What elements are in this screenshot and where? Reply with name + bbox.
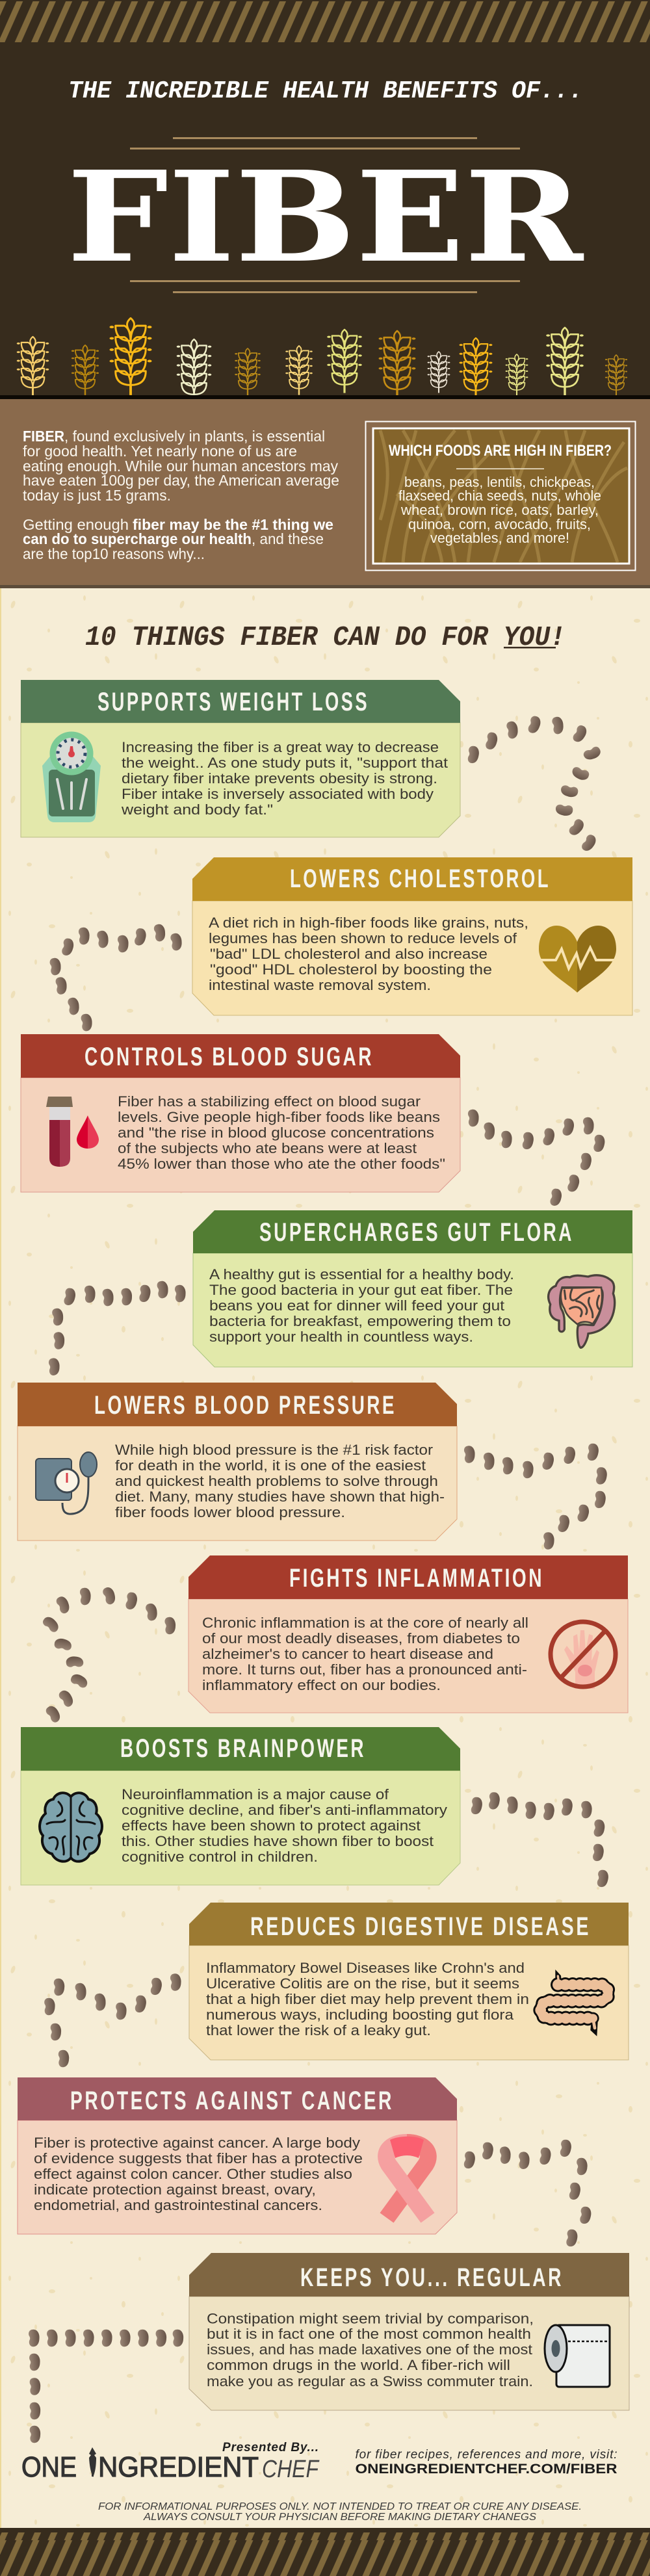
icon: brain [40, 1793, 102, 1862]
foods list: beans, peas, lentils, chickpeas, [404, 474, 595, 490]
intro text: Getting enough [23, 516, 129, 533]
body text: 45% lower than those who ate the other foods" [118, 1156, 445, 1172]
black divider [0, 395, 650, 399]
page background [0, 588, 650, 2532]
icon: inflamed hand [551, 1622, 616, 1689]
presented by: Presented By... [222, 2441, 318, 2454]
intro text: today is just 15 grams. [23, 487, 171, 504]
icon: toilet paper [545, 2325, 610, 2387]
website call to action [355, 2448, 618, 2477]
foods callout box [365, 421, 636, 571]
icon: carrot [89, 2447, 96, 2477]
body text: effects have been shown to protect against [122, 1817, 421, 1834]
body text [34, 2135, 363, 2213]
body text: that lower the risk of a leaky gut. [206, 2022, 431, 2038]
body text: alzheimer's to cancer to heart disease and [202, 1646, 493, 1662]
logo: one ingredient chef: ONE [21, 2451, 77, 2483]
body text: intestinal waste removal system. [209, 977, 431, 993]
icon: heart [539, 926, 616, 993]
heading: LOWERS BLOOD PRESSURE [94, 1391, 396, 1420]
wheat row [17, 319, 627, 403]
body text [202, 1615, 528, 1693]
body text [209, 915, 528, 993]
body text [118, 1093, 445, 1172]
body text: common drugs in the world. A fiber-rich will [207, 2357, 510, 2373]
body text [206, 1960, 529, 2038]
intro text: for good health. Yet nearly none of us are [23, 443, 297, 460]
logo: one ingredient chef [21, 2441, 319, 2483]
bean trail 3 [467, 1109, 605, 1206]
body text: that a high fiber diet may help prevent them in [206, 1991, 529, 2007]
bean trail 2 [49, 923, 183, 1032]
body text: and "the rise in blood glucose concentrations [118, 1125, 434, 1141]
heading: BOOSTS BRAINPOWER [120, 1734, 366, 1763]
body text: bacteria for breakfast, empowering them to [209, 1313, 511, 1329]
left edge strip [0, 588, 1, 2529]
disclaimer [98, 2501, 582, 2523]
body text: numerous ways, including boosting gut flora [206, 2007, 514, 2023]
body text: A healthy gut is essential for a healthy body. [209, 1266, 514, 1282]
body text: weight and body fat." [121, 801, 273, 818]
logo: one ingredient chef: NGREDIENT [98, 2451, 259, 2483]
body text: support your health in countless ways. [209, 1329, 473, 1345]
bean trail 9 [463, 2139, 592, 2247]
body text [121, 739, 448, 818]
body text: of our most deadly diseases, from diabetes to [202, 1630, 520, 1646]
body text: "good" HDL cholesterol by boosting the [210, 961, 492, 978]
body text: fiber foods lower blood pressure. [115, 1504, 345, 1520]
body text [115, 1442, 445, 1520]
main title: FIBER [67, 144, 584, 291]
body text: Fiber intake is inversely associated with body [122, 786, 434, 802]
logo: one ingredient chef: I [90, 2451, 96, 2483]
background speckle texture [0, 588, 650, 2532]
intro text [23, 428, 339, 562]
icon: blood pressure monitor [36, 1452, 97, 1514]
disclaimer: ALWAYS CONSULT YOUR PHYSICIAN BEFORE MAKING DIETARY CHANEGS [143, 2512, 537, 2523]
intro text: are the top10 reasons why... [23, 545, 205, 562]
body text: inflammatory effect on our bodies. [202, 1677, 441, 1693]
intro text: can do to supercharge our health [23, 530, 252, 547]
panel: dark header [0, 0, 650, 403]
logo: one ingredient chef: CHEF [262, 2456, 319, 2483]
panel: lowers blood pressure [18, 1383, 457, 1541]
body text: indicate protection against breast, ovary, [34, 2181, 316, 2198]
intro text: eating enough. While our human ancestors may [23, 458, 338, 475]
intro text: , and these [252, 530, 324, 547]
panel: keeps you regular [189, 2253, 629, 2410]
icon: gut [549, 1275, 615, 1347]
foods list: quinoa, corn, avocado, fruits, [408, 516, 591, 532]
intro text: have eaten 100g per day, the American average [23, 472, 339, 489]
bean trail 4 [48, 1281, 187, 1376]
body text [209, 1266, 514, 1345]
subtitle: THE INCREDIBLE HEALTH BENEFITS OF... [68, 77, 583, 105]
heading: FIGHTS INFLAMMATION [289, 1564, 544, 1593]
body text: of evidence suggests that fiber has a protective [34, 2150, 363, 2166]
body text: Inflammatory Bowel Diseases like Crohn's and [206, 1960, 525, 1976]
panel: reduces digestive disease [189, 1903, 629, 2060]
icon: ribbon [386, 2137, 428, 2218]
bean trail 1 [467, 715, 603, 853]
body text: the weight.. As one study puts it, "support that [122, 755, 448, 771]
panel: introduction [0, 399, 650, 588]
body text: Increasing the fiber is a great way to decrease [122, 739, 439, 755]
body text: Ulcerative Colitis are on the rise, but it seems [206, 1975, 519, 1992]
body text: effect against colon cancer. Other studies also [34, 2166, 352, 2182]
body text: dietary fiber intake prevents obesity is strong. [122, 770, 437, 787]
heading: PROTECTS AGAINST CANCER [70, 2087, 394, 2115]
body text: beans you eat for dinner will feed your gut [209, 1297, 504, 1314]
website call to action: for fiber recipes, references and more, visit: [355, 2448, 618, 2462]
body text: "bad" LDL cholesterol and also increase [210, 946, 488, 962]
bean trail 10 [28, 2329, 184, 2443]
body text: cognitive control in children. [122, 1849, 318, 1865]
body text: The good bacteria in your gut eat fiber. The [209, 1282, 513, 1298]
body text: but it is in fact one of the most common health [207, 2326, 531, 2342]
body text: levels. Give people high-fiber foods like beans [118, 1109, 440, 1125]
intro text: , found exclusively in plants, is essential [64, 428, 325, 445]
icon: test tube and drop [46, 1097, 99, 1167]
body text: endometrial, and gastrointestinal cancers. [34, 2197, 322, 2213]
body text: and quickest health problems to solve through [115, 1473, 438, 1489]
bean trail 5 [463, 1443, 607, 1550]
body text: for death in the world, it is one of the easiest [115, 1457, 426, 1474]
body text: While high blood pressure is the #1 risk factor [115, 1442, 433, 1458]
panel: protects against cancer [18, 2077, 457, 2234]
lower rules [130, 280, 520, 293]
foods list: wheat, brown rice, oats, barley, [400, 502, 599, 518]
body text: this. Other studies have shown fiber to boost [122, 1833, 434, 1849]
body text [207, 2310, 534, 2389]
icon: intestines [541, 1970, 608, 2036]
panel: lowers cholesterol [192, 857, 632, 1015]
body text: more. It turns out, fiber has a pronounced anti- [202, 1661, 527, 1678]
heading: SUPPORTS WEIGHT LOSS [98, 688, 369, 716]
heading: CONTROLS BLOOD SUGAR [84, 1043, 374, 1071]
bean trail 6 [41, 1586, 176, 1724]
panel: supports weight loss [21, 680, 460, 837]
section heading: 10 THINGS FIBER CAN DO FOR YOU! [85, 621, 566, 653]
body text: Constipation might seem trivial by comparison, [207, 2310, 534, 2327]
panel: boosts brainpower [21, 1727, 460, 1885]
body text [122, 1786, 447, 1865]
body text: of the subjects who ate beans were at least [118, 1140, 417, 1156]
body text: make you as regular as a Swiss commuter train. [207, 2373, 533, 2389]
foods list: vegetables, and more! [430, 530, 569, 546]
striped top band [0, 1, 650, 42]
foods list [398, 474, 601, 546]
body text: A diet rich in high-fiber foods like grains, nuts, [209, 915, 528, 931]
body text: Fiber is protective against cancer. A large body [34, 2135, 360, 2151]
upper rules [130, 137, 520, 150]
intro text: FIBER [23, 428, 64, 445]
panel: controls blood sugar [21, 1034, 460, 1192]
body text: Neuroinflammation is a major cause of [122, 1786, 389, 1802]
body text: diet. Many, many studies have shown that high- [115, 1489, 445, 1505]
body text: issues, and has made laxatives one of the most [207, 2341, 532, 2358]
intro text: fiber may be the #1 thing we [133, 516, 333, 533]
disclaimer: FOR INFORMATIONAL PURPOSES ONLY. NOT INTENDED TO TREAT OR CURE ANY DISEASE. [98, 2501, 582, 2512]
bean trail 7 [471, 1792, 609, 1888]
body text: Fiber has a stabilizing effect on blood sugar [118, 1093, 421, 1110]
body text: cognitive decline, and fiber's anti-inflammatory [122, 1802, 447, 1818]
body text: legumes has been shown to reduce levels of [209, 930, 517, 946]
bean trail 8 [44, 1973, 182, 2068]
striped bottom band [0, 2528, 650, 2576]
foods list: flaxseed, chia seeds, nuts, whole [398, 488, 601, 504]
icon: scale [42, 732, 101, 822]
body text: Chronic inflammation is at the core of nearly all [202, 1615, 528, 1631]
panel: fights inflammation [188, 1555, 628, 1713]
website call to action: ONEINGREDIENTCHEF.COM/FIBER [355, 2462, 618, 2477]
panel: supercharges gut flora [193, 1210, 632, 1367]
